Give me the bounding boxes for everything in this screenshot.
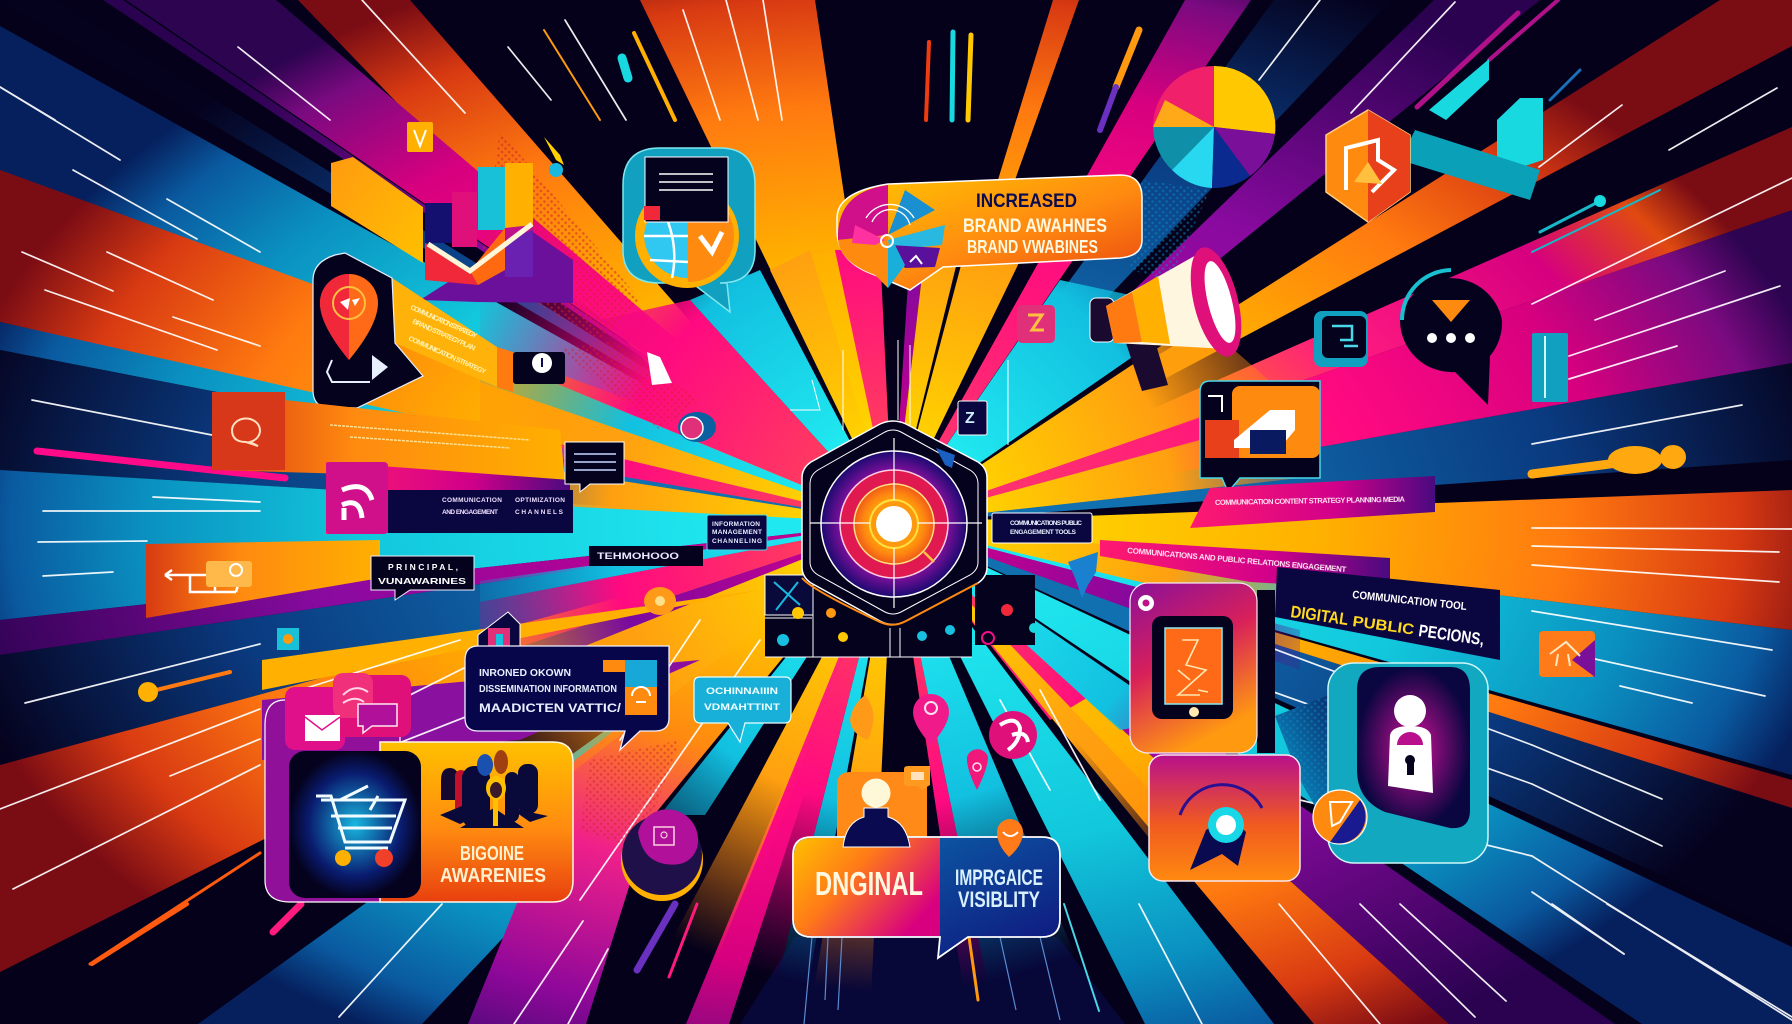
inner rays [640, 180, 893, 523]
callout: digital visibility bubble: DNGINAL [815, 865, 923, 902]
halftone patches [480, 130, 1210, 850]
banner: upper right text strip [1190, 476, 1435, 528]
panel: magenta icon with text: COMMUNICATION [442, 497, 502, 504]
callout: digital visibility bubble: IMPRGAICE [955, 865, 1043, 890]
label box: dark text with tail [371, 556, 474, 600]
hub dots [975, 575, 1039, 645]
icon: signal pie [838, 185, 945, 288]
label box: left of hub: INFORMATION [712, 521, 760, 528]
label box: teal tag [694, 677, 791, 742]
label box: left of hub: MANAGEMENT [712, 529, 762, 536]
panel: orange arrow icon banner [146, 540, 380, 618]
text lines: COMMUNICATION STRATEGY [407, 335, 487, 376]
banner: upper right text strip: COMMUNICATION CONTENT STRATEGY PLANNING MEDIA [1215, 495, 1406, 507]
icon: shopping cart [289, 751, 421, 898]
panel: digital public text: PUBLIC [1351, 613, 1415, 639]
icon: check [700, 232, 722, 252]
panel: person card behind bubble [837, 766, 930, 840]
label box: left of hub: CHANNELING [712, 538, 762, 545]
small pointer icon right of hub [1068, 552, 1098, 598]
callout: increased brand awareness bubble: BRAND AWAHNES [963, 216, 1107, 237]
icon: orange pin [997, 819, 1023, 857]
icon: teal box right [1532, 333, 1568, 402]
banner: right magenta text strip [1100, 540, 1390, 590]
icon: house tile [478, 612, 520, 668]
panel: cart and awareness card: AWARENIES [440, 865, 546, 887]
icon: play triangle [327, 355, 388, 382]
icon: split circle badge [1313, 790, 1367, 844]
panel: globe speech bubble [623, 148, 755, 312]
label box: dark text with tail: PRINCIPAL, [388, 562, 458, 572]
callout: digital visibility bubble: VISIBLITY [958, 887, 1040, 912]
icon stack [603, 660, 657, 715]
icon: chat circle with dots [1400, 270, 1502, 405]
panel: cart and awareness card [265, 673, 573, 902]
panel: lock icon [1275, 663, 1488, 863]
icon: pink camera circle [678, 412, 716, 442]
text lines: COMMUNICATION STRATEGY [409, 304, 478, 340]
icon: orange hexagon badge [1326, 110, 1410, 222]
panel: dark text card [465, 646, 669, 750]
icon: small teal link tile [1314, 311, 1368, 367]
connector lines above hub [790, 340, 1008, 445]
panel: dark text card: MAADICTEN VATTIC/ [479, 701, 622, 715]
icon: cyan blocks [1400, 59, 1543, 200]
callout: digital visibility bubble [793, 778, 1060, 958]
panel: digital public text: DIGITAL [1289, 602, 1350, 629]
label box: left of hub [707, 515, 767, 550]
icon: photo envelope card [1200, 381, 1320, 492]
label box: right of hub [992, 513, 1092, 543]
panel: cart and awareness card: BIGOINE [460, 843, 524, 865]
navy floor under bubble [740, 937, 1125, 1024]
icon: teal square [277, 628, 299, 650]
panel: map pin text card [313, 253, 513, 408]
panel: magenta icon with text: OPTIMIZATION [515, 497, 565, 504]
panel: digital public text [1275, 567, 1500, 660]
panel: magenta icon with text: CHANNELS [515, 509, 564, 516]
decorative dots on streak ends [138, 137, 1686, 702]
text lines: BRAND STRATEGY PLAN [411, 318, 476, 352]
text lines [407, 304, 487, 376]
icon: white document shard [647, 352, 672, 385]
callout: increased brand awareness bubble [837, 175, 1142, 290]
panel: magenta icon with text [326, 462, 573, 534]
icon: dark chat tile [565, 442, 624, 492]
icon: person [843, 778, 910, 847]
callout: increased brand awareness bubble: INCREASED [976, 191, 1077, 212]
icon: megaphone [1090, 242, 1251, 391]
panel: orange bubble icon banner [212, 392, 565, 480]
icon: Z tile: Z [965, 410, 975, 427]
label box: right of hub: ENGAGEMENT TOOLS [1010, 529, 1077, 536]
icon: purple sphere [621, 809, 703, 901]
bar chart with check mark icon [331, 157, 573, 303]
label box: teal tag: OCHINNAIIIN [706, 686, 778, 696]
panel: digital public text: PECIONS, [1417, 621, 1485, 649]
icon: map pin [320, 274, 378, 360]
icon: small dark chat tile [513, 352, 565, 384]
icon: envelope tag [1539, 631, 1595, 677]
icon: pink mail tile [285, 673, 411, 750]
panel: magenta icon with text: AND ENGAGEMENT [442, 509, 498, 516]
callout: increased brand awareness bubble: BRAND VWABINES [967, 237, 1098, 257]
icon: crowd silhouettes [440, 750, 548, 828]
panel: tablet card [1130, 583, 1275, 753]
icon: orange drop [644, 587, 676, 615]
panel: digital public text: COMMUNICATION TOOL [1352, 589, 1468, 613]
label box: technology tag [589, 546, 703, 566]
icons: drop shapes below hub [850, 694, 1037, 790]
label box: right of hub: COMMUNICATIONS PUBLIC [1010, 520, 1082, 527]
label box: technology tag: TEHMOHOOO [597, 551, 679, 561]
icon: orange tag [904, 766, 930, 790]
label box: dark text with tail: VUNAWARINES [378, 576, 466, 586]
thin lines under bubble [804, 937, 1060, 1024]
panel: dark text card: DISSEMINATION INFORMATION [479, 684, 617, 695]
label box: teal tag: VDMAHTTINT [704, 702, 781, 712]
icon: small yellow badge [407, 122, 433, 152]
banner: right magenta text strip: COMMUNICATIONS AND PUBLIC RELATIONS ENGAGEMENT [1127, 546, 1347, 574]
hub: dark grid base [765, 575, 972, 657]
icon: x mark [774, 582, 800, 610]
pie chart [1153, 66, 1275, 188]
icon: small orange tile [1017, 305, 1055, 343]
icon: Z tile [958, 401, 987, 435]
hub: central target hexagon [802, 421, 987, 625]
panel: signal icon card [1149, 755, 1300, 881]
panel: dark text card: INRONED OKOWN [479, 668, 571, 679]
